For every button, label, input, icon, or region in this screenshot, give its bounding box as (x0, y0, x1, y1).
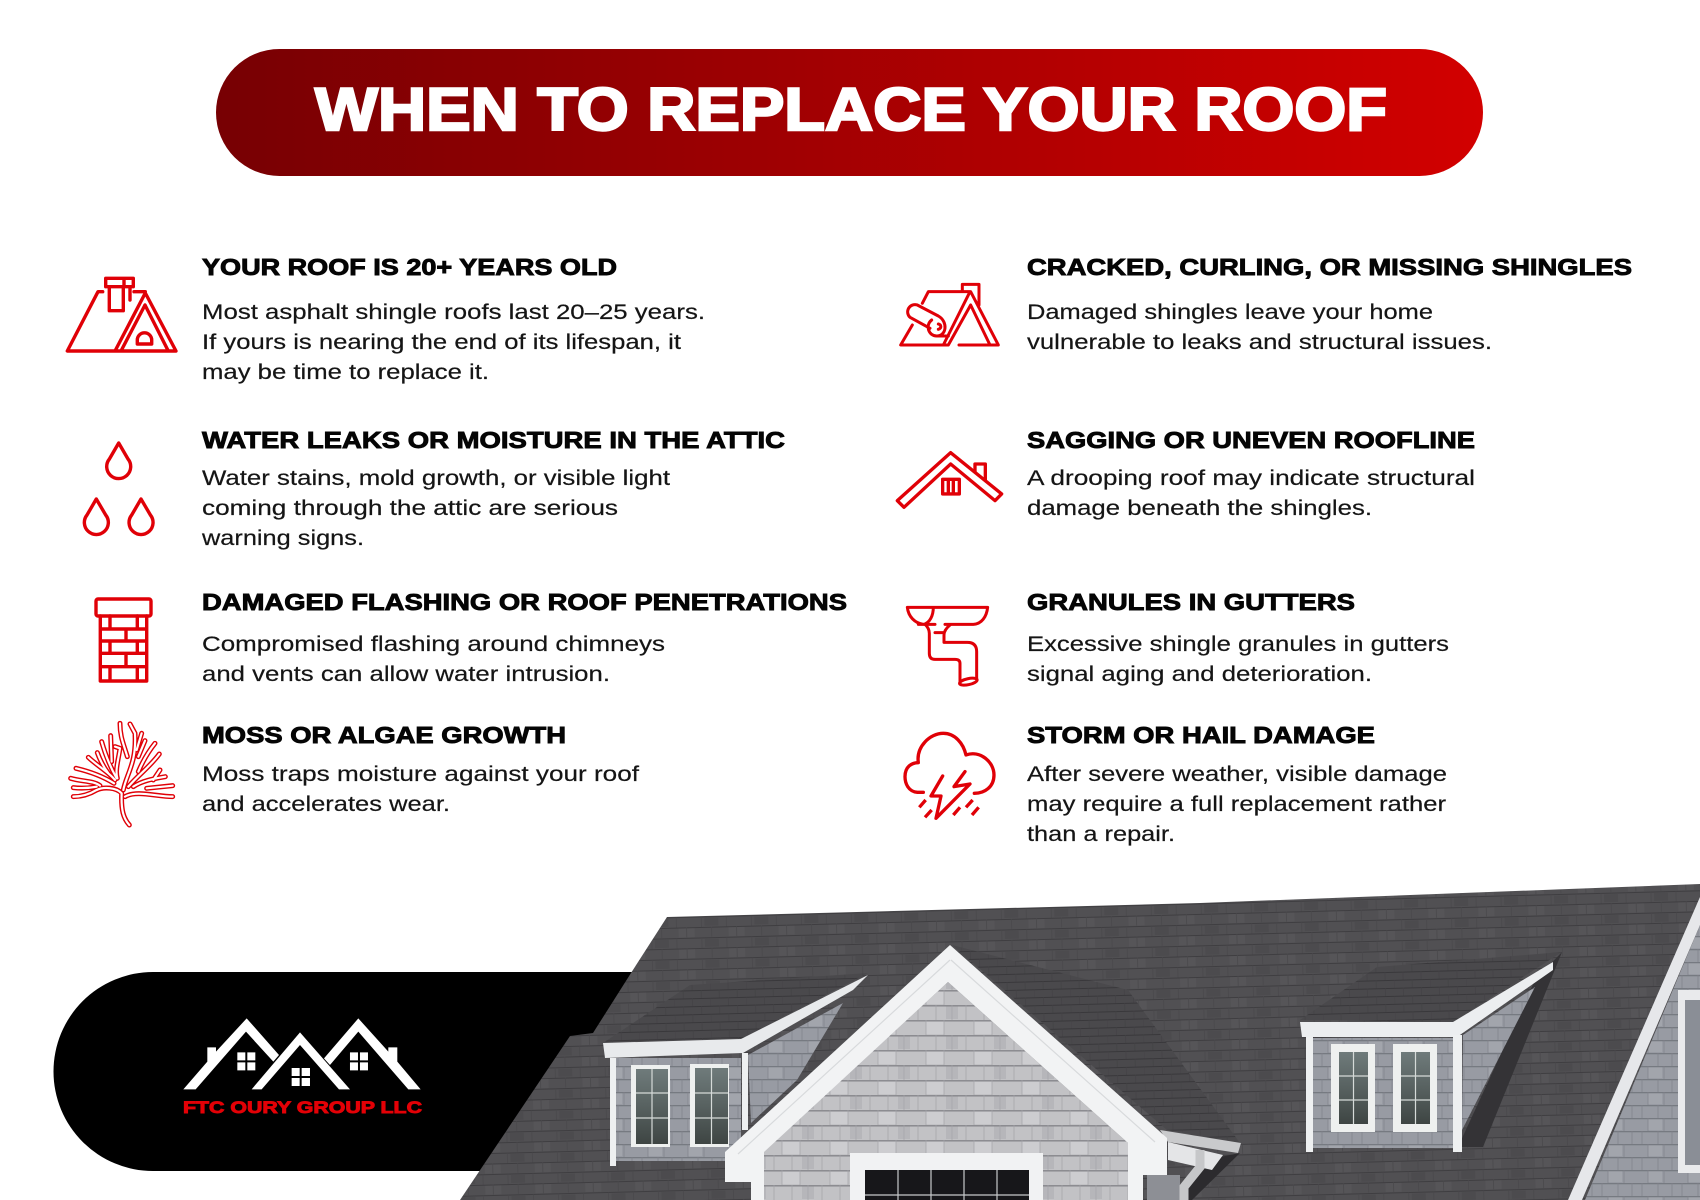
gable right roof slope (952, 945, 1240, 1143)
description: Damaged shingles leave your home (1027, 300, 1433, 324)
item: granules (907, 589, 1449, 686)
description: After severe weather, visible damage (1027, 762, 1447, 786)
heading: SAGGING OR UNEVEN ROOFLINE (1027, 427, 1475, 453)
description: vulnerable to leaks and structural issues. (1027, 330, 1492, 354)
heading: GRANULES IN GUTTERS (1027, 589, 1355, 615)
description: Compromised flashing around chimneys (202, 632, 665, 656)
heading: DAMAGED FLASHING OR ROOF PENETRATIONS (202, 589, 847, 615)
description (202, 762, 639, 816)
description: damage beneath the shingles. (1027, 496, 1372, 520)
description (1027, 762, 1447, 846)
description: A drooping roof may indicate structural (1027, 466, 1475, 490)
description (1027, 632, 1449, 686)
title banner (216, 49, 1483, 176)
description: and accelerates wear. (202, 792, 450, 816)
icon: moss tree (71, 723, 173, 825)
icon: brick chimney (96, 599, 151, 681)
windows (1331, 1044, 1437, 1132)
main roof (460, 884, 1700, 1200)
title: WHEN TO REPLACE YOUR ROOF (315, 76, 1387, 143)
heading: MOSS OR ALGAE GROWTH (202, 722, 566, 748)
description (1027, 300, 1492, 354)
description: than a repair. (1027, 822, 1175, 846)
description (1027, 466, 1475, 520)
description (201, 466, 670, 550)
icon: roofline (897, 453, 1002, 507)
item: moss (71, 722, 639, 825)
main gable (725, 945, 1167, 1200)
item: water leaks (84, 427, 785, 550)
heading: STORM OR HAIL DAMAGE (1027, 722, 1375, 748)
gable window (850, 1153, 1043, 1200)
description (202, 632, 665, 686)
item: sagging (897, 427, 1475, 520)
item: storm (905, 722, 1447, 846)
logo pill (53, 972, 660, 1171)
item: shingles (901, 254, 1632, 354)
description: signal aging and deterioration. (1027, 662, 1372, 686)
icon: gutter (907, 607, 988, 686)
icon: water drops (84, 443, 153, 535)
heading: YOUR ROOF IS 20+ YEARS OLD (202, 254, 617, 280)
item: flashing (96, 589, 847, 686)
right dormer (1300, 952, 1562, 1152)
description: may require a full replacement rather (1027, 792, 1446, 816)
description: warning signs. (201, 526, 364, 550)
description: If yours is nearing the end of its lifespan, it (202, 330, 681, 354)
description: may be time to replace it. (202, 360, 489, 384)
photo: house roof (460, 884, 1700, 1200)
description: coming through the attic are serious (202, 496, 618, 520)
description: Moss traps moisture against your roof (202, 762, 639, 786)
item: roof age (67, 254, 705, 384)
description: Water stains, mold growth, or visible light (202, 466, 670, 490)
heading: CRACKED, CURLING, OR MISSING SHINGLES (1027, 254, 1632, 280)
icon: storm cloud (905, 733, 994, 818)
left dormer (603, 973, 868, 1166)
windows (631, 1064, 729, 1147)
icon: roof with curled shingle (901, 284, 998, 345)
far right gable wall (1568, 897, 1700, 1200)
logo mark: three roofs (183, 1018, 421, 1089)
description (202, 300, 705, 384)
description: Most asphalt shingle roofs last 20–25 years. (202, 300, 705, 324)
cornice and downspout (1143, 1130, 1241, 1200)
description: and vents can allow water intrusion. (202, 662, 610, 686)
logo name: FTC OURY GROUP LLC (183, 1098, 422, 1117)
description: Excessive shingle granules in gutters (1027, 632, 1449, 656)
icon: house roof with chimney (67, 278, 176, 351)
heading: WATER LEAKS OR MOISTURE IN THE ATTIC (202, 427, 785, 453)
